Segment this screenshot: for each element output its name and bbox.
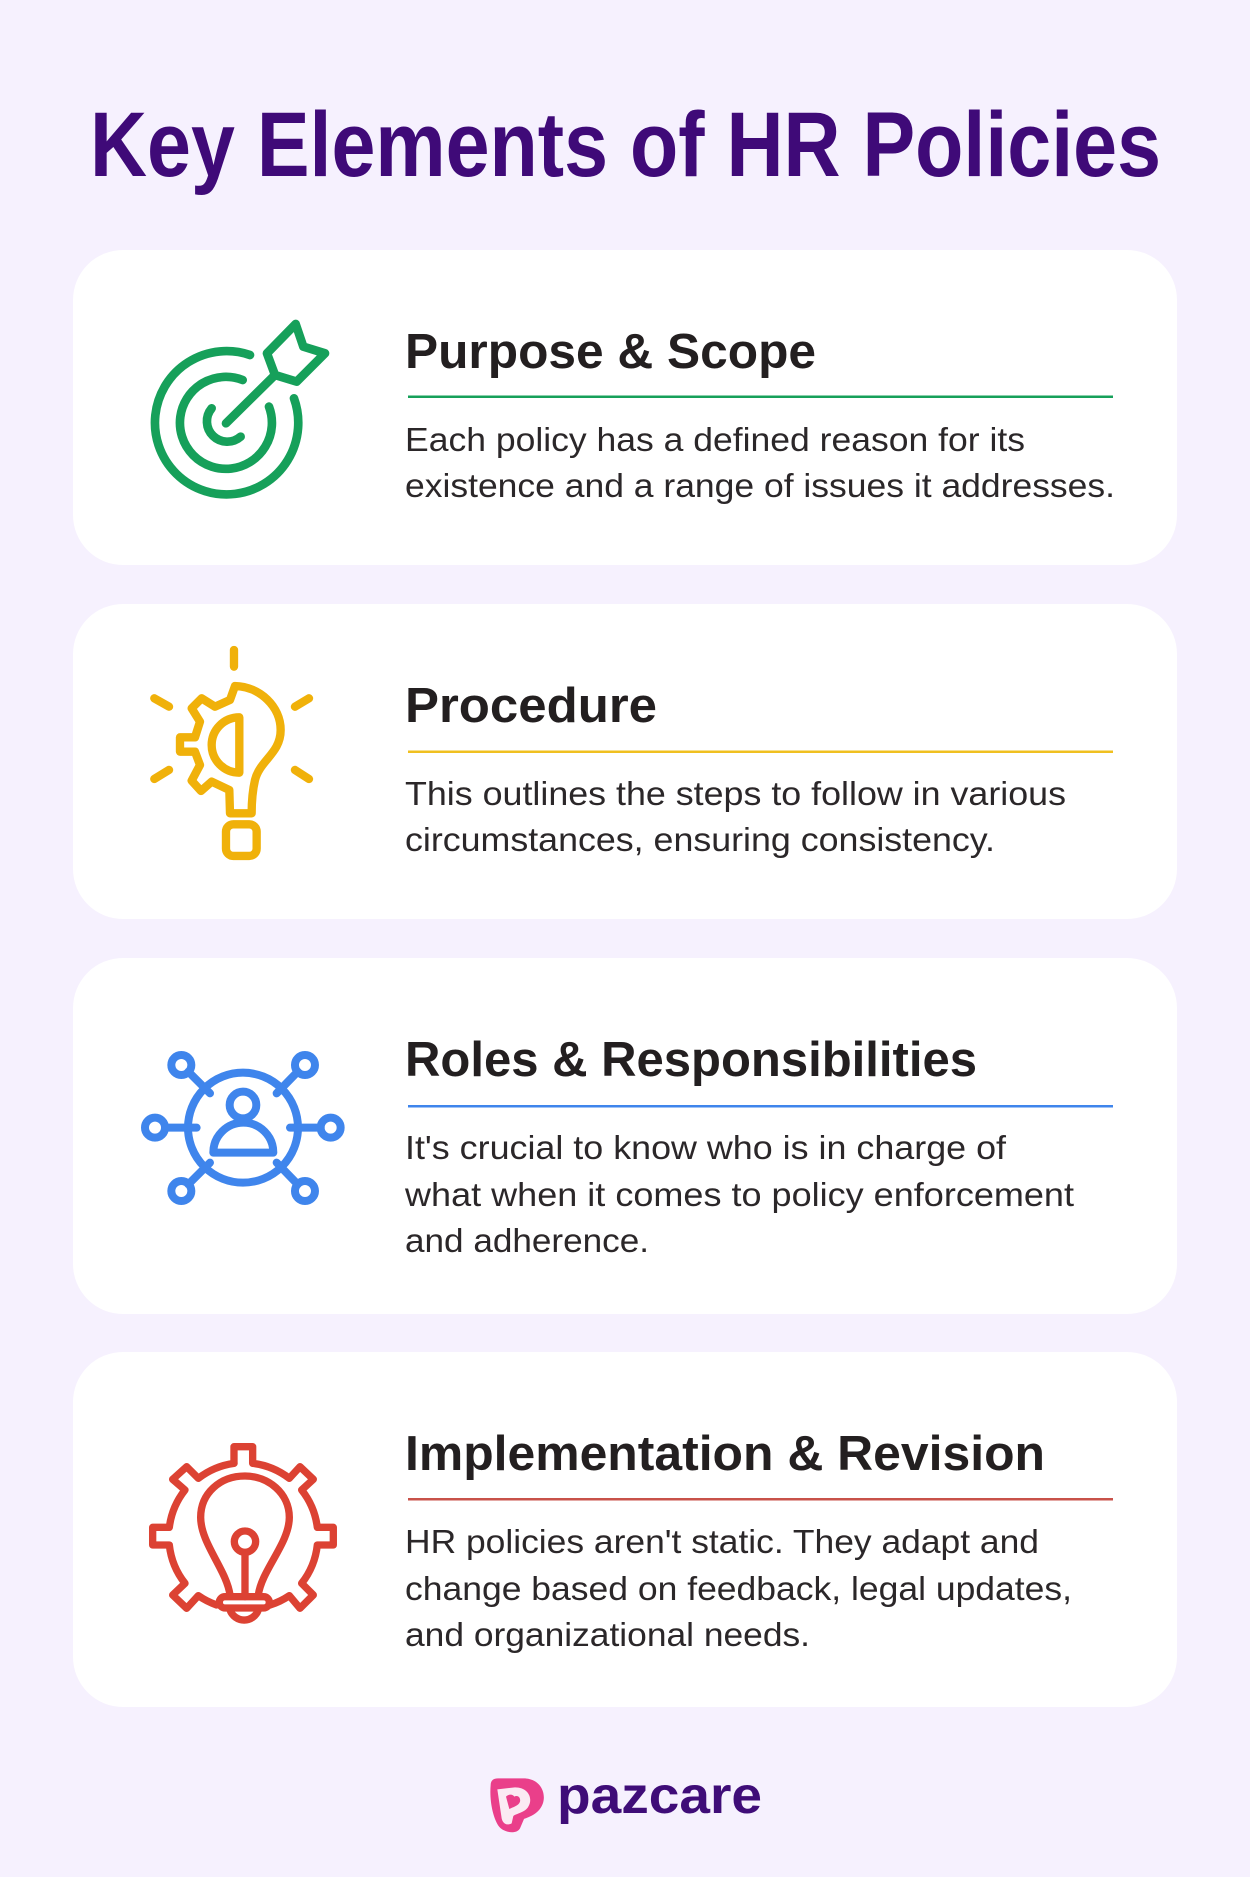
text block [405,775,1066,858]
icon: target with arrow [155,324,325,494]
text block [405,1523,1072,1653]
icon: lightbulb with gear [154,650,309,856]
text block: and adherence. [405,1222,649,1259]
text block [404,1129,1074,1259]
panel: implementation and revision [73,1352,1177,1707]
text block: existence and a range of issues it addresses. [405,467,1115,504]
text block: and organizational needs. [405,1616,810,1653]
text block: HR policies aren't static. They adapt and [405,1523,1039,1560]
text block [405,421,1115,504]
panel: procedure [73,604,1177,919]
heading: Roles & Responsibilities [405,1033,977,1087]
icon: gear with lightbulb [153,1447,333,1620]
text block: This outlines the steps to follow in various [405,775,1066,812]
logo: pazcare [490,1767,762,1832]
icon: person network [145,1055,341,1201]
wordmark: pazcare [557,1767,762,1825]
panel: roles and responsibilities [73,958,1177,1314]
text block: circumstances, ensuring consistency. [405,821,995,858]
heading: Procedure [405,679,657,733]
text block: what when it comes to policy enforcement [404,1176,1074,1213]
icon: pazcare mark [490,1778,544,1832]
text block: It's crucial to know who is in charge of [405,1129,1007,1166]
heading: Implementation & Revision [405,1427,1045,1481]
text block: change based on feedback, legal updates, [405,1570,1072,1607]
panel: purpose and scope [73,250,1177,565]
heading: Purpose & Scope [405,325,816,379]
text block: Each policy has a defined reason for its [405,421,1025,458]
